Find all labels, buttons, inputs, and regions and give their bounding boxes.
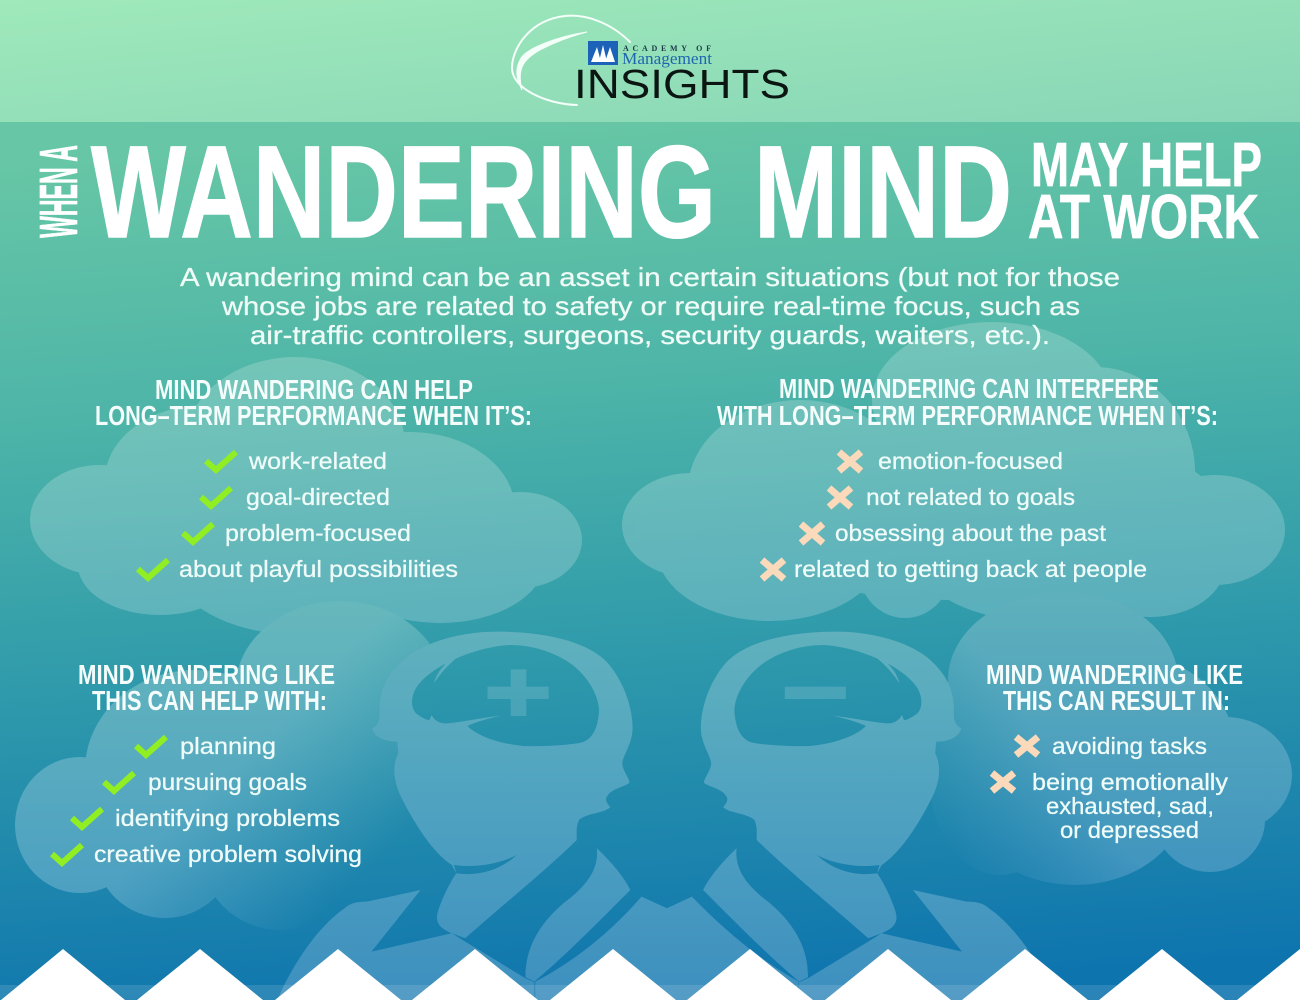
cross list: exhausted, sad, [1046,793,1214,819]
cross list: related to getting back at people [794,556,1147,582]
cloud: upper right [622,322,1285,623]
cross list [762,448,1147,582]
head, neck and brain cut-out [372,632,633,938]
check list: about playful possibilities [179,556,458,582]
cross list: being emotionally [1032,769,1229,795]
head, neck and brain cut-out [701,632,961,938]
heading: THIS CAN HELP WITH: [92,685,327,716]
right lapel [703,848,808,982]
logo swoosh arcs [512,16,630,105]
right jacket [799,890,1056,1000]
bottom band [0,985,1300,1000]
heading [717,373,1218,431]
cloud: lower right [930,592,1292,885]
check list: goal-directed [246,484,390,510]
cross list [992,733,1229,843]
logo wordmark: ACADEMY OF [623,44,711,53]
logo wordmark: INSIGHTS [574,61,790,107]
title [29,118,1262,265]
panel: can interfere with long-term performance [717,373,1218,582]
heading: THIS CAN RESULT IN: [1003,685,1230,716]
brain highlight [434,647,474,683]
logo blue square [588,41,618,65]
check list: creative problem solving [94,841,362,867]
heading: MIND WANDERING LIKE [78,659,335,690]
figure: right head with minus [701,632,1056,1000]
check list [138,448,458,582]
heading: MIND WANDERING CAN INTERFERE [779,373,1159,404]
intro text: whose jobs are related to safety or require real-time focus, such as [221,291,1080,321]
intro text: A wandering mind can be an asset in certain situations (but not for those [180,262,1120,292]
panel: can help with [52,659,362,867]
shirt front [535,897,799,1000]
check list: problem-focused [225,520,411,546]
intro text [180,262,1120,350]
check list [52,733,362,867]
logo wordmark [574,44,790,107]
panel: can result in [986,659,1243,843]
plus sign [487,669,549,716]
heading [95,374,532,431]
check list: planning [180,733,276,759]
check list: identifying problems [115,805,340,831]
logo wordmark: Management [622,49,712,68]
cloud: upper left [30,357,582,635]
heading: MIND WANDERING CAN HELP [155,374,473,405]
heading [78,659,335,716]
title: MIND [754,118,1012,265]
minus sign [785,687,846,699]
heading: LONG–TERM PERFORMANCE WHEN IT’S: [95,400,532,431]
cross list: avoiding tasks [1052,733,1207,759]
title: WANDERING [91,118,716,265]
cross list: not related to goals [866,484,1075,510]
figures: two facing head silhouettes [278,632,1056,1000]
figure: left head with plus [278,632,633,1000]
header band [0,0,1300,122]
intro text: air-traffic controllers, surgeons, security guards, waiters, etc.). [250,320,1050,350]
cross list: or depressed [1060,817,1199,843]
panel: can help long-term performance [95,374,532,582]
white zigzag edge [1,949,1300,1000]
brain highlight [859,647,900,683]
cross list: obsessing about the past [835,520,1107,546]
left lapel [525,848,630,982]
cross list: emotion-focused [878,448,1063,474]
check list: pursuing goals [148,769,307,795]
left jacket [278,890,534,1000]
logo: Academy of Management Insights [512,16,790,107]
check list: work-related [248,448,387,474]
cloud: lower left [15,601,445,930]
title: WHEN A [29,145,89,238]
heading [986,659,1243,716]
